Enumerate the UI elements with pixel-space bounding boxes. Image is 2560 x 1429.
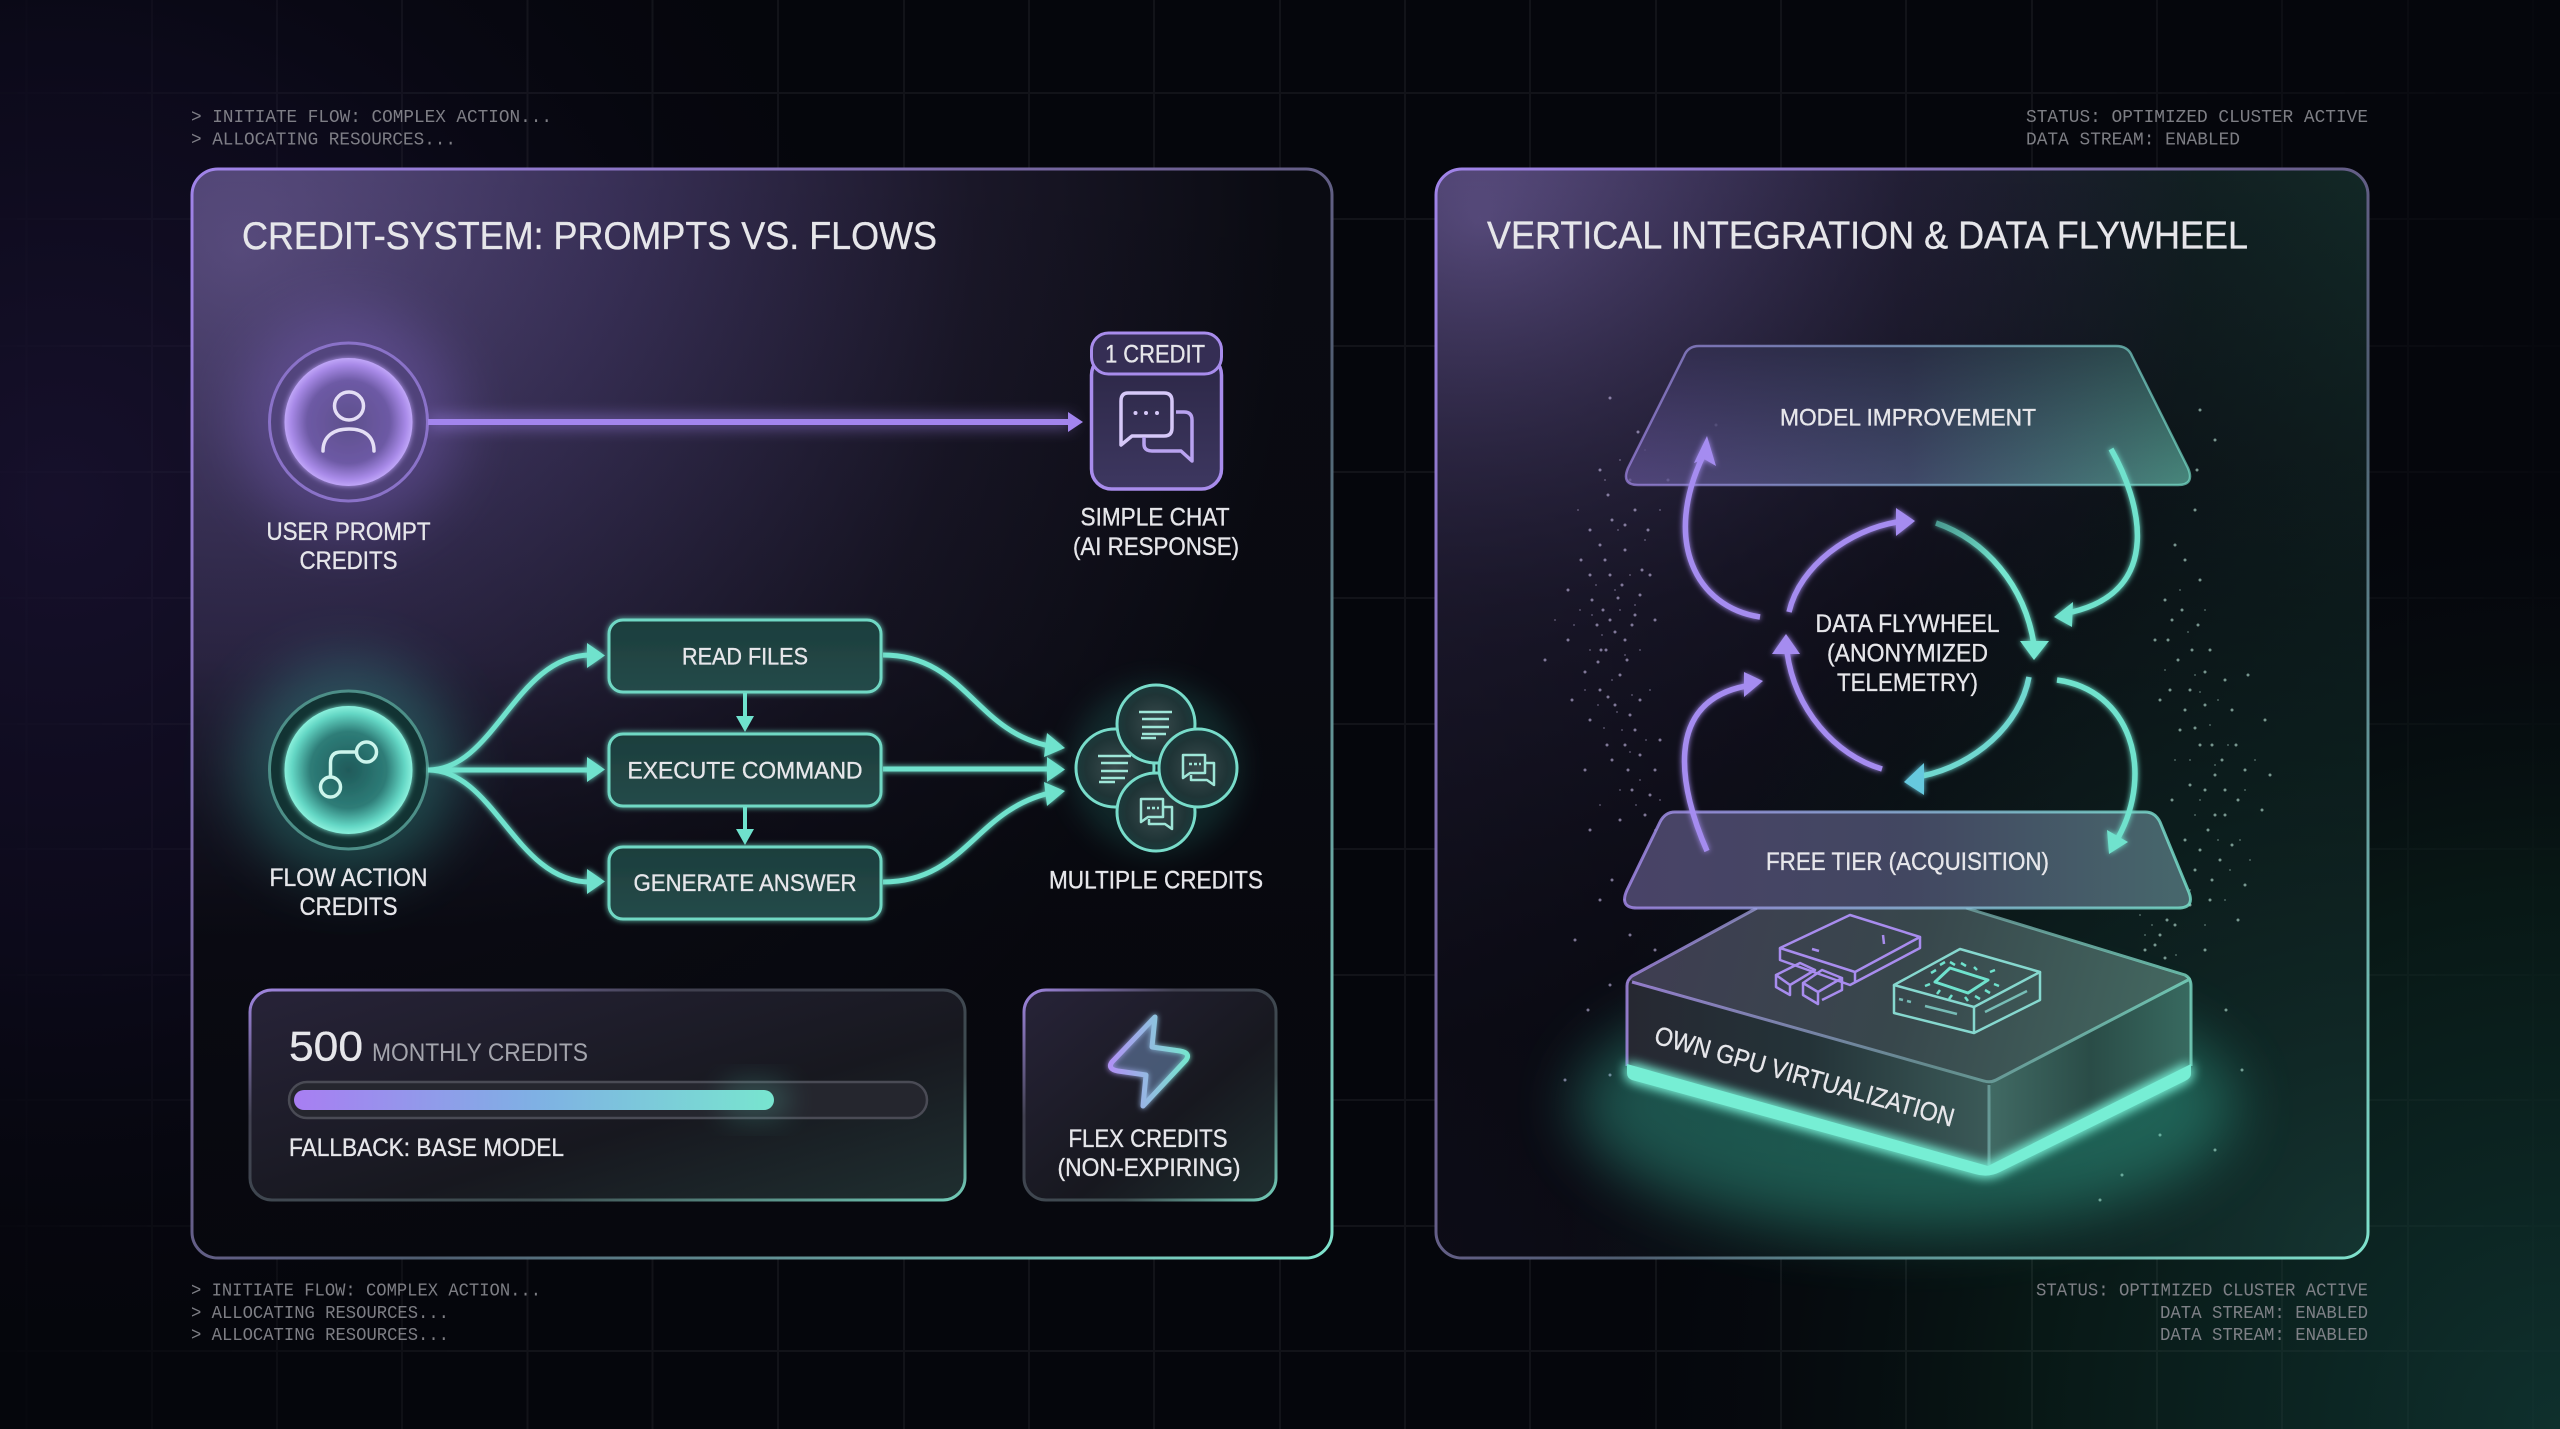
flywheel: inner cycle — [1772, 508, 2049, 795]
icon: chat cluster — [1141, 755, 1214, 829]
label: simple chat: SIMPLE CHAT — [1080, 504, 1230, 532]
label: monthly credits: MONTHLY CREDITS — [372, 1039, 588, 1067]
value: 500: 500 — [289, 1022, 363, 1070]
step: read files: READ FILES — [682, 644, 808, 670]
node: simple chat — [1092, 333, 1222, 489]
step: read files — [609, 620, 881, 692]
label: flow action credits — [270, 864, 428, 921]
panel: credit system — [192, 169, 1332, 1258]
arc: purple bottom left — [1772, 634, 1882, 769]
badge: 1 credit — [1092, 333, 1222, 374]
label: flex credits: FLEX CREDITS — [1068, 1125, 1228, 1153]
arrow: prompt to chat — [428, 412, 1083, 432]
tier: free tier — [1625, 812, 2190, 908]
title: vertical integration: VERTICAL INTEGRATION & DATA FLYWHEEL — [1487, 214, 2248, 258]
card: flex credits — [1024, 990, 1276, 1200]
console text: top right — [2026, 108, 2368, 150]
tier: model improvement: MODEL IMPROVEMENT — [1780, 404, 2036, 432]
console text: top left — [191, 108, 552, 150]
console text: top left: > INITIATE FLOW: COMPLEX ACTION... — [191, 108, 552, 128]
node: flow action — [240, 662, 456, 878]
arrow: execute to generate — [736, 807, 754, 845]
icon: lightning bolt — [1110, 1017, 1188, 1106]
arc: purple top left — [1789, 508, 1915, 612]
console text: bottom left: > ALLOCATING RESOURCES... — [191, 1326, 449, 1346]
label: simple chat: (AI RESPONSE) — [1073, 533, 1239, 561]
tier: free tier: FREE TIER (ACQUISITION) — [1766, 848, 2049, 876]
label: user prompt credits: USER PROMPT — [266, 518, 430, 546]
flywheel: outer loops — [1684, 436, 2137, 854]
arrows: steps to credits — [883, 655, 1065, 882]
label: data flywheel: TELEMETRY) — [1837, 669, 1978, 697]
console text: bottom right: DATA STREAM: ENABLED — [2160, 1326, 2368, 1346]
label: flex credits — [1058, 1125, 1240, 1182]
badge: 1 credit: 1 CREDIT — [1105, 340, 1205, 368]
console text: bottom right: DATA STREAM: ENABLED — [2160, 1304, 2368, 1324]
card: monthly credits — [250, 990, 965, 1200]
arrows: flow to steps — [428, 643, 605, 894]
label: flow action credits: FLOW ACTION — [270, 864, 428, 892]
arc: teal top right — [1936, 523, 2049, 660]
icon: CPU box — [1894, 949, 2040, 1033]
label: flex credits: (NON-EXPIRING) — [1058, 1154, 1240, 1182]
label: flow action credits: CREDITS — [300, 893, 398, 921]
progress bar — [289, 1080, 927, 1120]
step: generate answer: GENERATE ANSWER — [634, 870, 856, 897]
icon: list documents — [1098, 712, 1172, 782]
arrow: read to execute — [736, 693, 754, 732]
label: fallback: FALLBACK: BASE MODEL — [289, 1134, 564, 1162]
label: user prompt credits — [266, 518, 430, 575]
arrow: flywheel down to free tier — [2057, 680, 2135, 854]
label: user prompt credits: CREDITS — [300, 547, 398, 575]
label: data flywheel — [1816, 610, 2000, 697]
label: data flywheel: (ANONYMIZED — [1827, 640, 1988, 668]
console text: top right: DATA STREAM: ENABLED — [2026, 130, 2240, 150]
console text: top right: STATUS: OPTIMIZED CLUSTER ACTIVE — [2026, 108, 2368, 128]
tier: model improvement — [1626, 346, 2190, 485]
label: multiple credits: MULTIPLE CREDITS — [1049, 866, 1263, 894]
icon: chat bubbles — [1121, 393, 1192, 461]
label: simple chat — [1073, 504, 1239, 561]
arrow: model improvement down to flywheel — [2054, 449, 2137, 627]
label: own GPU virtualization: OWN GPU VIRTUALIZATION — [1651, 1020, 1958, 1133]
console text: bottom left: > ALLOCATING RESOURCES... — [191, 1304, 449, 1324]
arrow: up to model improvement — [1685, 436, 1760, 617]
step: generate answer — [609, 847, 881, 919]
step: execute command: EXECUTE COMMAND — [628, 758, 862, 784]
arc: teal bottom right — [1904, 677, 2029, 795]
node: user prompt — [238, 312, 458, 532]
console text: bottom right: STATUS: OPTIMIZED CLUSTER ACTIVE — [2036, 1282, 2368, 1302]
arrow: free tier up to flywheel — [1684, 672, 1763, 851]
icon: person — [323, 392, 374, 451]
node: multiple credits cluster — [1071, 683, 1241, 853]
icon: GPU card — [1776, 915, 1920, 1004]
console text: bottom left: > INITIATE FLOW: COMPLEX ACTION... — [191, 1282, 541, 1302]
icon: flow nodes — [320, 742, 376, 797]
block faces — [1627, 908, 2191, 1167]
console text: top left: > ALLOCATING RESOURCES... — [191, 130, 456, 150]
title: credit system: CREDIT-SYSTEM: PROMPTS VS. FLOWS — [242, 215, 937, 258]
console text: bottom right — [2036, 1282, 2368, 1346]
step: execute command — [609, 734, 881, 806]
console text: bottom left — [191, 1282, 541, 1346]
label: data flywheel: DATA FLYWHEEL — [1816, 610, 2000, 638]
glowing base strip — [1627, 1064, 2191, 1176]
panel: vertical integration — [1436, 169, 2368, 1258]
particles — [1545, 398, 2270, 1200]
block: own GPU virtualization — [1575, 908, 2235, 1230]
